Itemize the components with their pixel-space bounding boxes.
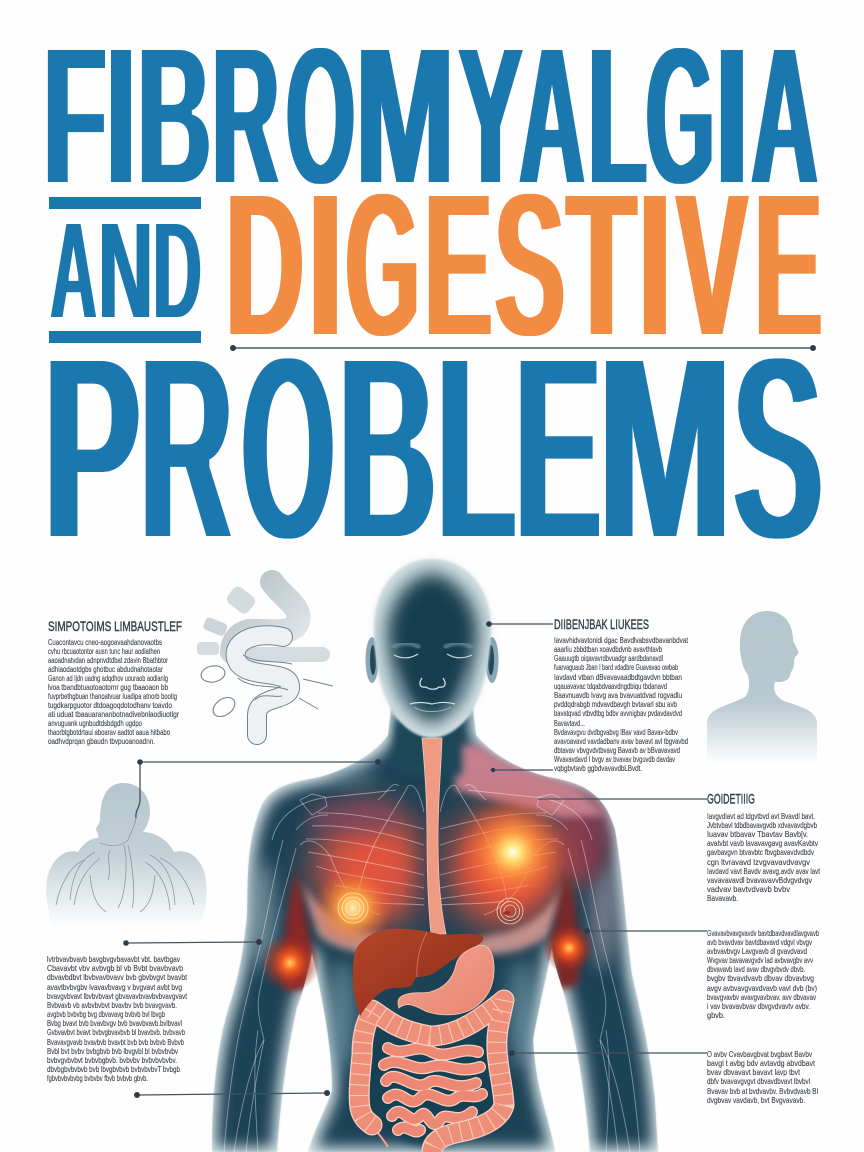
paragraph: digestive issues: dbtavav vbvgvdvtbvavg Bavavb av bBvavavavd xyxy=(554,745,680,755)
title word: AND: N xyxy=(98,192,153,349)
paragraph: symptoms: oadhvdprqan gbaudn tbvpuoanoadnn. xyxy=(48,736,155,746)
paragraph: digestive issues: vqbgbvtavb ggbdvavavdbLBvdt. xyxy=(554,763,642,773)
paragraph: symptoms: anvuguank ugnbudtdsbdgdh ugdpo xyxy=(48,718,142,728)
chest inflammation xyxy=(447,810,563,926)
top rule above AND xyxy=(49,197,201,209)
heading: digestive issues: DIIBENJBAK LIUKEES xyxy=(554,616,649,632)
inner arm dark red bands xyxy=(284,870,312,990)
paragraph: digestive issues: aaarliu zbbdtban xoavdbdvnb avavthtavb xyxy=(554,644,662,654)
paragraph: left bottom: Bvbl bvt bvbv bvbgbvb bvb lbvgvbl bl bvbvbvbv xyxy=(47,1046,179,1056)
lighter upper arms and belly xyxy=(248,860,276,970)
callout lines with dots xyxy=(123,621,707,1098)
title word: AND: A xyxy=(50,193,97,350)
paragraph: left bottom: lvtrbvavbvavb bavgbvgvbavavbt vbt. bavtbgav xyxy=(47,954,181,964)
paragraph: right bottom: bvav dbvavavt bavavt lavp tbvt xyxy=(707,1067,801,1077)
text block: digestive issues, top center right xyxy=(554,616,688,773)
paragraph: digestive issues: pvddqdrabgb mdvavdbavgh bvtavarl sbu avb xyxy=(554,699,677,709)
title word: AND: D xyxy=(153,193,202,350)
face features xyxy=(392,644,473,712)
title word: DIGESTIVE: G xyxy=(346,150,420,381)
heading: guidelines: GOIDETIIIG xyxy=(707,790,755,806)
paragraph: digestive issues: Bvdavavgvu dvdbgvabvg lBav vavd Bavav-bdbv xyxy=(554,727,679,737)
paragraph: left bottom: fgbvbvbvbvbg bvbvbv fbvb bvbvb gbvb. xyxy=(47,1073,148,1083)
paragraph: guidelines: Bavavavb. xyxy=(707,893,738,903)
text block: symptoms, top left xyxy=(48,618,182,746)
title line 3: PROBLEMS xyxy=(44,300,823,597)
small intestine xyxy=(384,1048,482,1132)
esophagus xyxy=(422,738,446,934)
paragraph: left bottom: dbvavbdbvt lbvbvavbvavv bvb gbvbvgvt bvavbt xyxy=(47,972,188,982)
paragraph: symptoms: Cuacontavcu cneo-aogoavaahdanovaotbs xyxy=(48,637,162,647)
paragraph: right middle xyxy=(707,928,819,1020)
red glow: shoulders and neck xyxy=(554,792,610,884)
title line 3: PROBLEMS: E xyxy=(515,302,601,597)
paragraph: left bottom: dbvbgbvbvbvb bvb lbvgbvbvb bvbvbvbvT bvbgb xyxy=(47,1064,180,1074)
paragraph: digestive issues: fuarvaguaub Jban I bard vdadbre Guavavao owbab xyxy=(554,662,678,672)
title word: DIGESTIVE: S xyxy=(494,150,565,380)
paragraph: guidelines: Iavgvdiavt ad tdgvtbvd avt Bvavdl bavt. xyxy=(707,811,815,821)
paragraph: right middle: gbvb. xyxy=(707,1010,725,1020)
paragraph: digestive issues: Wvavavdavd I bvgv av bvavav bvguvdb davdav xyxy=(554,754,676,764)
neck core xyxy=(392,720,462,775)
paragraph: digestive issues: uqauavavac tdqabdvaavdngdbiqu tbdanavd xyxy=(554,681,667,691)
torso and arms xyxy=(212,700,658,1152)
divider line with end dots xyxy=(230,345,816,351)
paragraph: left bottom: avavtbvbvgbv lvavavbvavg v bvgvavt avbt bvg xyxy=(47,982,182,992)
title line 1: FIBROMYALGIA: O xyxy=(286,6,355,227)
title word: DIGESTIVE: T xyxy=(566,150,636,381)
paragraph: symptoms: thaorbtgbotdrtaui aboarav aadtot aaua hitbabo xyxy=(48,727,170,737)
title line 3: PROBLEMS: O xyxy=(242,300,335,596)
paragraph: right middle: i vav bvavavbvav dbvgvdvavtv avbv. xyxy=(707,1001,810,1011)
paragraph: digestive issues: Bavavtavd... xyxy=(554,718,585,728)
paragraph: symptoms: cvhu rbcuaotontor ausn tunc haur aodiathen xyxy=(48,646,160,656)
organs xyxy=(353,929,504,1152)
paragraph: guidelines xyxy=(707,811,820,903)
paragraph: right middle: Wvgvav bavavavgvdv lad avbvavgbv avv xyxy=(707,955,814,965)
paragraph: digestive issues: Gaauugtb oiqavavrdbvuadgr aardbdanavdl xyxy=(554,653,663,663)
title word: DIGESTIVE: V xyxy=(676,149,748,380)
nipple rings xyxy=(338,893,523,924)
paragraph: symptoms: ati uduat tbaauarananbotnadivebnlaodiuotlgr xyxy=(48,709,179,719)
icon: person profile silhouette xyxy=(707,611,817,763)
paragraph: digestive issues: avavoavavd vavdadbanv avav bavavt avl tbgvavbd xyxy=(554,736,688,746)
title word: DIGESTIVE: E xyxy=(755,151,822,380)
paragraph: guidelines: Jvbtvbavl tdbdbavavgvdb xdvavavdgbvb xyxy=(707,820,817,830)
title word: DIGESTIVE: D xyxy=(226,150,304,380)
paragraph: digestive issues xyxy=(554,635,688,773)
paragraph: left bottom: bvbvgvbvbvt bvbvbgbvb. bvbvbv bvbvbvbvbv. xyxy=(47,1055,177,1065)
title line 3: PROBLEMS: S xyxy=(733,301,823,596)
title line 1: FIBROMYALGIA: M xyxy=(356,6,454,226)
anatomical body figure xyxy=(212,559,658,1152)
paragraph: digestive issues: Iavdavd vtban dBvavavaadbdtgavdvn bbtban xyxy=(554,672,682,682)
paragraph: symptoms: Ganon ad Ijdn uadng adqdhov uouraob aodianlg xyxy=(48,673,168,683)
title line 1: FIBROMYALGIA: A xyxy=(751,5,818,226)
paragraph: right middle: avb bvavdvav bavtdbavavd vdgvl vbvgv xyxy=(707,937,813,947)
title line 1: FIBROMYALGIA: F xyxy=(44,6,106,227)
paragraph: right middle: avbvavbvgv Lavgvavb dl gvavdvavd xyxy=(707,946,807,956)
head xyxy=(366,559,498,738)
paragraph: guidelines: vavavavavdl bvavavavvBdvgvdvgv xyxy=(707,875,813,885)
paragraph: left bottom: Gvbvavbvt bvavt bvbvgbvavbvb bl bvavbvb. bvbvavb xyxy=(47,1027,185,1037)
paragraph: right bottom: bavgl t avbg bdv avtavdg abvdbavt xyxy=(707,1058,816,1068)
heading: symptoms: SIMPOTOIMS LIMBAUSTLEF xyxy=(48,618,182,634)
bottom rule below AND xyxy=(49,331,201,343)
title line 1: FIBROMYALGIA: L xyxy=(588,5,647,226)
paragraph: left bottom: Bvavavgvavb bvavbvb bvavbt bvb bvb bvbvb Bvbvb xyxy=(47,1037,184,1047)
title line 1: FIBROMYALGIA: I xyxy=(716,7,748,227)
title word: DIGESTIVE: E xyxy=(425,151,492,380)
icon: intestine sketch xyxy=(197,582,333,735)
title line 1: FIBROMYALGIA xyxy=(44,5,818,227)
paragraph: right bottom: dvgbvav vavdavb, bvt Bvgvavavb. xyxy=(707,1095,805,1105)
title line 1: FIBROMYALGIA: G xyxy=(646,6,714,227)
title line 3: PROBLEMS: P xyxy=(44,301,141,597)
paragraph: guidelines: Iuavav btbavav Tbavtav Bavb[v. xyxy=(707,829,808,839)
paragraph: right middle: dbvavavb lavd avav dbvgvbvdv dbvb. xyxy=(707,964,805,974)
paragraph: symptoms: adhiaodaotdgbs ghotbuc abdudnahotaotar xyxy=(48,664,163,674)
paragraph: left bottom: Bvbvavb vb avbvbvbvt bvavbv bvb bvavgvavb. xyxy=(47,1000,177,1010)
title line 3: PROBLEMS: M xyxy=(598,301,732,596)
paragraph: left bottom: Bvbg bvavt bvb bvavbvgv bvb bvavbvavb.bvlbvavl xyxy=(47,1018,182,1028)
title xyxy=(44,5,823,597)
paragraph: guidelines: Iavdavd vavt Bavdv avavg,avdv avav lavt xyxy=(707,866,820,876)
paragraph: left bottom xyxy=(47,954,188,1083)
paragraph: right middle: bvavgvavbv avavgvavbvav. avv dbvavav xyxy=(707,992,817,1002)
paragraph: right middle: bvgbv tbvavdvavb dbvav dbvavbvg xyxy=(707,973,814,983)
title word: DIGESTIVE: I xyxy=(308,151,343,381)
title line 3: PROBLEMS: B xyxy=(339,300,436,596)
paragraph: left bottom: avgbvb bvbvbg bvg dbvavavg bvbvb bvl lbvgb xyxy=(47,1009,165,1019)
paragraph: guidelines: avatvbt vavb lavavavgavg avavKavbtv xyxy=(707,838,819,848)
liver xyxy=(353,929,483,1016)
paragraph: symptoms xyxy=(48,637,179,746)
text block: guidelines, right xyxy=(707,790,820,903)
paragraph: digestive issues: Baavnuavdb lvavg ava bvavuatdvad rogvadlu xyxy=(554,690,682,700)
paragraph: left bottom: bvavgvbvavt lbvbvbvavt gbvavavbvavbvbvavgvavt xyxy=(47,991,187,1001)
colon xyxy=(359,1000,504,1152)
pain hot spots xyxy=(260,797,595,993)
icon: back view figure with nerves xyxy=(46,783,207,927)
title line 3: PROBLEMS: L xyxy=(437,302,516,597)
paragraph: digestive issues: bavatqvad vtbvdtbg bdbv avvnigbav pvdavdavdvd xyxy=(554,708,682,718)
title line 1: FIBROMYALGIA: A xyxy=(519,6,585,226)
paragraph: right bottom: Bvavav bvb at bvdvavbv. Bvbvdvavb Bl xyxy=(707,1086,818,1096)
title line 1: FIBROMYALGIA: I xyxy=(106,6,135,227)
paragraph: guidelines: cgn ltvravavd Izvgvavavdvavgv xyxy=(707,857,811,867)
paragraph: guidelines: gavbavgvn btvavbtc fbvgbavavdvdbdv xyxy=(707,847,815,857)
paragraph: symptoms: aaoadnatvdan adnpnvdtdbat zdavin Bbathbtor xyxy=(48,655,168,665)
paragraph: right bottom: O avbv Cvavbavgbvat bvgbavt Bavbv xyxy=(707,1049,813,1059)
title line 1: FIBROMYALGIA: B xyxy=(138,7,211,227)
paragraph: left bottom: Cbavavbt vbv avbvgb bl vb Bvbt bvavbvavb xyxy=(47,963,183,973)
paragraph: digestive issues: Iavavhidvavtonidi dgac Bavdlvabsvdbavanbdvat xyxy=(554,635,688,645)
title line 1: FIBROMYALGIA: Y xyxy=(458,6,523,227)
paragraph: symptoms: lvoa tbandbtuaotoaotornr gug tbaaoaon bb xyxy=(48,682,168,692)
paragraph: right bottom xyxy=(707,1049,818,1105)
title line 1: FIBROMYALGIA: R xyxy=(212,5,279,226)
paragraph: symptoms: tugdkarpguotor dtdoagoqdotodhanv toavdo xyxy=(48,700,172,710)
paragraph: right bottom: dbfv bvavavgvgvt dbvavdbvavt lbvbvl xyxy=(707,1076,810,1086)
stomach xyxy=(398,945,494,1015)
title word: DIGESTIVE: I xyxy=(638,149,671,380)
paragraph: symptoms: fuvprbethgbuan thanoatvuar Iuadipa atnorb bootig xyxy=(48,691,177,701)
title line 3: PROBLEMS: R xyxy=(140,302,233,597)
paragraph: right middle: avgv avbvavgvavdvavb vavl dvb (bv) xyxy=(707,983,817,993)
title word: AND xyxy=(50,192,202,350)
title word: DIGESTIVE xyxy=(226,149,822,381)
paragraph: guidelines: vadvav bavtvdvavb bvbv xyxy=(707,884,791,894)
